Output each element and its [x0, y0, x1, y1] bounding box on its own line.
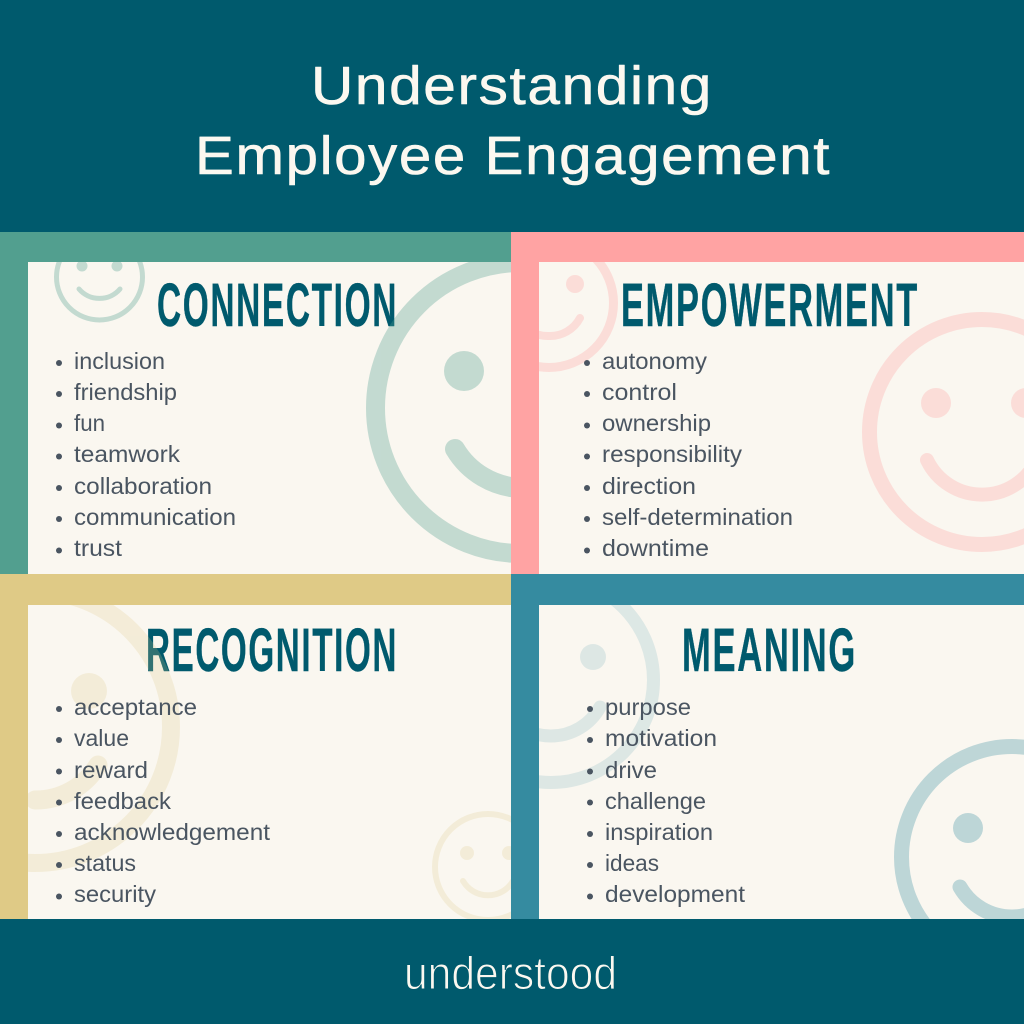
- icons: connection smileys: [54, 262, 511, 563]
- list: recognition: acceptance: [74, 694, 197, 720]
- list: empowerment: downtime: [602, 535, 709, 561]
- list: connection: communication: [74, 504, 236, 530]
- icon: meaning small smiley: [539, 605, 660, 789]
- list: empowerment: direction: [602, 473, 696, 499]
- list: meaning: [587, 694, 746, 907]
- list: connection: teamwork: [74, 441, 181, 467]
- list: meaning: development: [605, 881, 746, 907]
- icon: meaning large smiley: [894, 739, 1024, 919]
- list: recognition: value: [74, 725, 129, 751]
- list: meaning: drive: [605, 757, 657, 783]
- panel: empowerment: [484, 232, 1024, 574]
- list: empowerment: control: [602, 379, 677, 405]
- list: recognition: security: [74, 881, 157, 907]
- list: recognition: [56, 694, 271, 907]
- list: meaning: purpose: [605, 694, 691, 720]
- list: recognition: feedback: [74, 788, 172, 814]
- panel: recognition: [0, 574, 541, 920]
- icons: empowerment smileys: [539, 262, 1024, 552]
- title: Understanding: [311, 56, 713, 116]
- list: recognition: acknowledgement: [74, 819, 271, 845]
- list: empowerment: responsibility: [602, 441, 743, 467]
- list: connection: collaboration: [74, 473, 212, 499]
- list: connection: [56, 348, 236, 561]
- list: connection: fun: [74, 410, 105, 436]
- heading: meaning: MEANING: [682, 616, 857, 684]
- list: recognition: reward: [74, 757, 148, 783]
- header band: [0, 0, 1024, 232]
- list: meaning: inspiration: [605, 819, 713, 845]
- list: meaning: ideas: [605, 850, 659, 876]
- logo: understood: understood: [404, 947, 617, 999]
- panel: connection: [0, 232, 511, 574]
- list: connection: trust: [74, 535, 123, 561]
- list: empowerment: self-determination: [602, 504, 793, 530]
- list: empowerment: autonomy: [602, 348, 708, 374]
- list: empowerment: ownership: [602, 410, 711, 436]
- footer band: [0, 919, 1024, 1024]
- title: [195, 56, 831, 186]
- title: Employee Engagement: [195, 126, 831, 186]
- list: connection: inclusion: [74, 348, 165, 374]
- list: empowerment: [584, 348, 793, 561]
- list: connection: friendship: [74, 379, 177, 405]
- panel: meaning: [511, 574, 1024, 919]
- heading: connection: CONNECTION: [157, 271, 398, 339]
- list: recognition: status: [74, 850, 136, 876]
- icons: recognition smileys: [28, 605, 511, 919]
- list: meaning: motivation: [605, 725, 717, 751]
- heading: recognition: RECOGNITION: [146, 616, 398, 684]
- list: meaning: challenge: [605, 788, 706, 814]
